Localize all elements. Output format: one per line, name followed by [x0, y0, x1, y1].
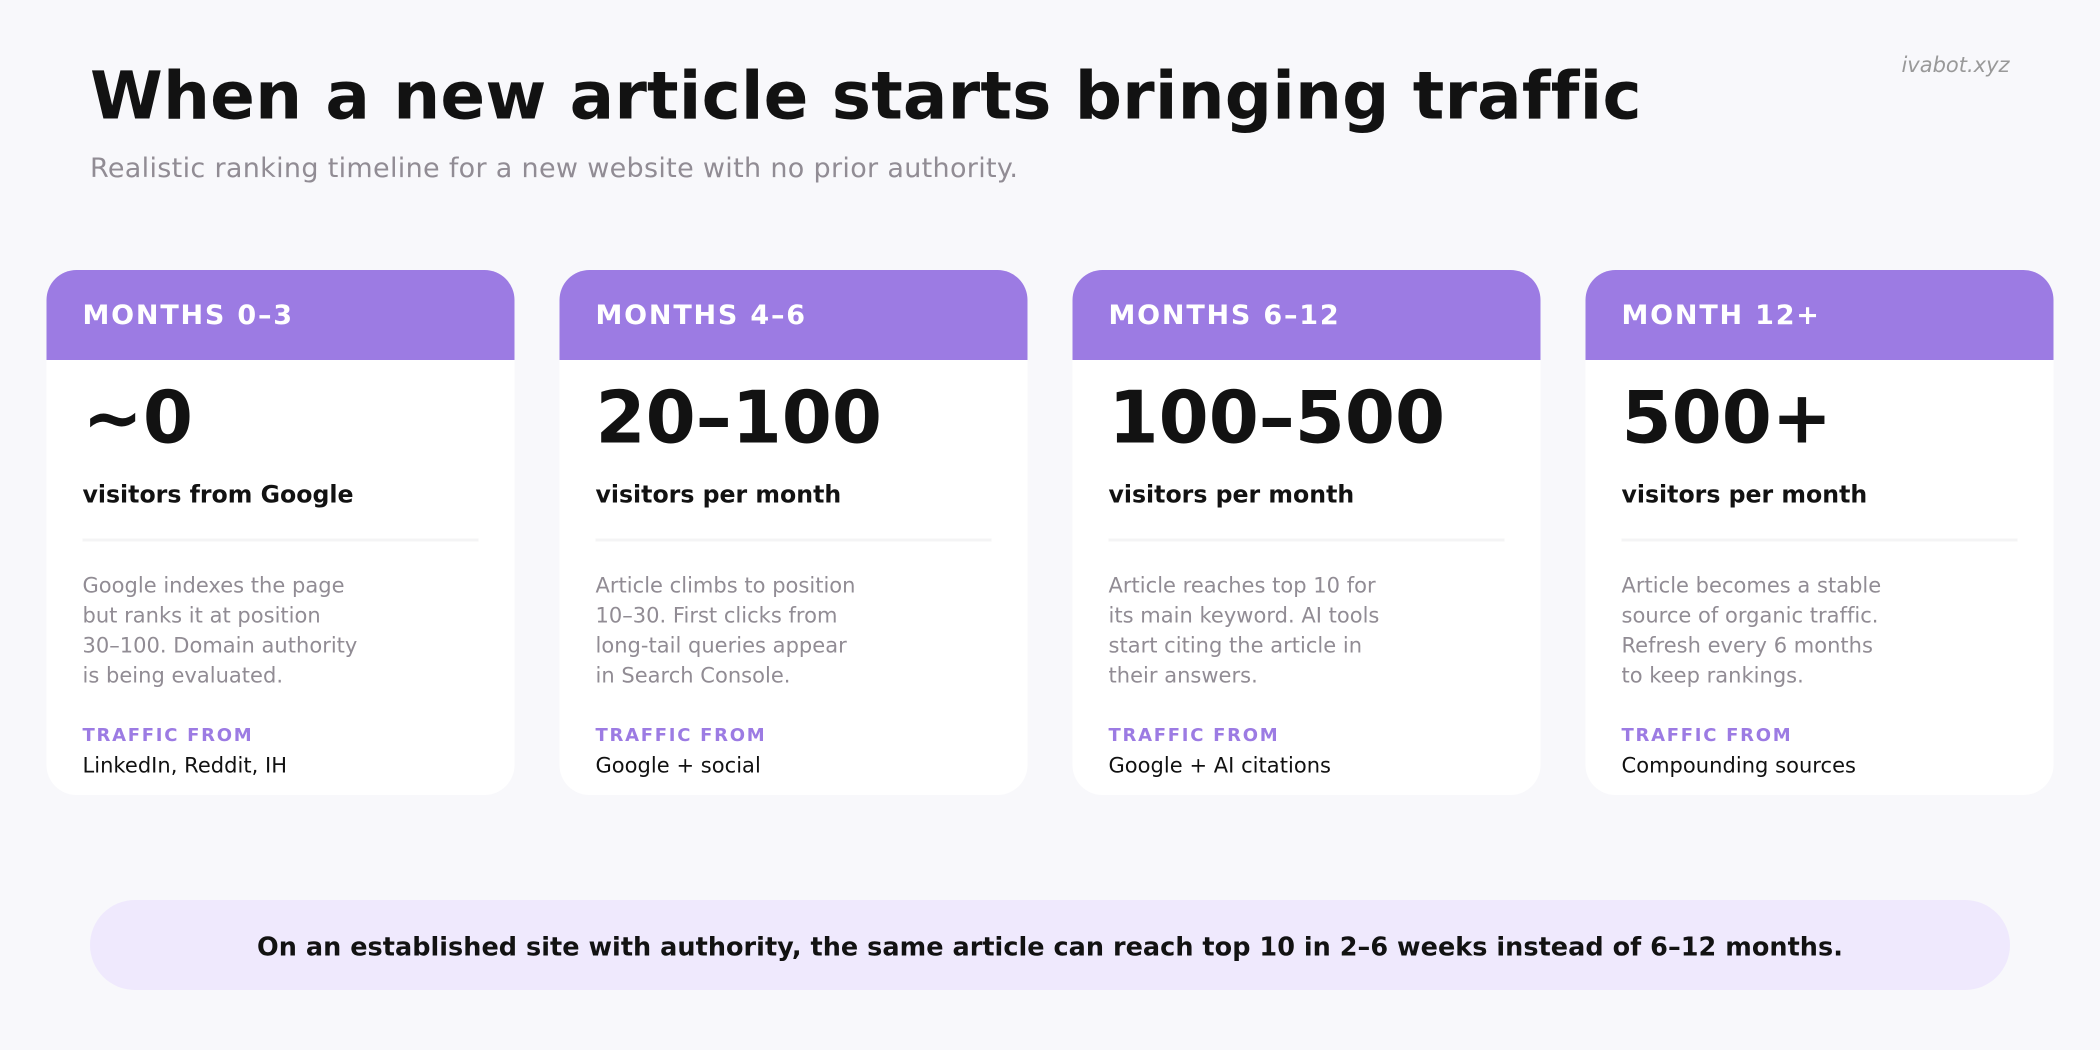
panel: months 6–12 [1072, 270, 1540, 795]
description: long-tail queries appear [596, 634, 847, 658]
traffic source label: TRAFFIC FROM [596, 724, 766, 746]
traffic source value: Google + social [596, 754, 761, 778]
metric label: visitors from Google [82, 480, 354, 508]
description: 10–30. First clicks from [596, 604, 837, 628]
description: their answers. [1108, 664, 1258, 688]
traffic source value: Compounding sources [1622, 754, 1856, 778]
panel header: month 12+ [1586, 270, 2054, 360]
description [596, 574, 855, 688]
description: Article becomes a stable [1622, 574, 1881, 598]
description [1108, 574, 1379, 688]
subtitle: Realistic ranking timeline for a new website with no prior authority. [90, 153, 1018, 184]
traffic source label: TRAFFIC FROM [82, 724, 253, 746]
metric label: visitors per month [1108, 480, 1354, 508]
traffic source value: Google + AI citations [1108, 754, 1331, 778]
panel: months 0–3 [46, 270, 514, 795]
traffic source label: TRAFFIC FROM [1622, 724, 1792, 746]
description: its main keyword. AI tools [1108, 604, 1379, 628]
metric label: visitors per month [596, 480, 841, 508]
description: is being evaluated. [82, 664, 283, 688]
description: Article climbs to position [596, 574, 855, 598]
description: in Search Console. [596, 664, 790, 688]
panel header: months 0–3: MONTHS 0–3 [82, 299, 294, 331]
callout [90, 900, 2010, 990]
traffic source label: TRAFFIC FROM [1108, 724, 1279, 746]
panel: month 12+ [1586, 270, 2054, 795]
description [82, 574, 357, 688]
big number: 100–500: 100–500 [1108, 376, 1445, 460]
panel header: months 4–6 [560, 270, 1028, 360]
panel header: months 0–3 [46, 270, 514, 360]
description: Article reaches top 10 for [1108, 574, 1376, 598]
big number: 500+: 500+ [1622, 376, 1832, 460]
panel: months 4–6 [560, 270, 1028, 795]
traffic source value: LinkedIn, Reddit, IH [82, 754, 287, 778]
description: source of organic traffic. [1622, 604, 1878, 628]
big number: 20–100: 20–100 [596, 376, 882, 460]
metric label: visitors per month [1622, 480, 1867, 508]
title: When a new article starts bringing traffic [90, 58, 1642, 135]
big number: ~0: ~0 [82, 376, 193, 460]
description: Refresh every 6 months [1622, 634, 1873, 658]
description: start citing the article in [1108, 634, 1362, 658]
panel header: months 6–12: MONTHS 6–12 [1108, 299, 1340, 331]
description [1622, 574, 1881, 688]
description: but ranks it at position [82, 604, 321, 628]
panel header: month 12+: MONTH 12+ [1622, 299, 1821, 331]
panel header: months 4–6: MONTHS 4–6 [596, 299, 807, 331]
callout: On an established site with authority, the same article can reach top 10 in 2–6 weeks instead of 6–12 months. [257, 932, 1843, 962]
description: to keep rankings. [1622, 664, 1804, 688]
watermark: ivabot.xyz [1901, 54, 2010, 78]
panel header: months 6–12 [1072, 270, 1540, 360]
description: 30–100. Domain authority [82, 634, 357, 658]
description: Google indexes the page [82, 574, 345, 598]
